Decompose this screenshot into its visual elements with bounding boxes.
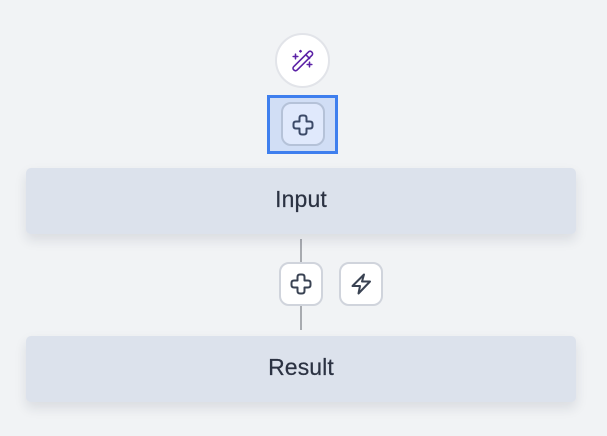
- icon: magic wand: [292, 50, 314, 72]
- icon: plus: [292, 114, 314, 136]
- icon: plus: [290, 274, 312, 294]
- lightning button: [339, 262, 383, 306]
- add button: selected: [281, 102, 325, 146]
- magic wand button: [275, 33, 330, 88]
- node: Result: Result: [268, 354, 334, 380]
- add button: [279, 262, 323, 306]
- connector line: upper: [300, 239, 302, 263]
- selected drop zone: [267, 95, 338, 154]
- node: Input: Input: [275, 186, 327, 212]
- connector line: lower: [300, 305, 302, 330]
- node: Input: [26, 168, 576, 234]
- node: Result: [26, 336, 576, 402]
- icon: lightning bolt: [352, 274, 371, 294]
